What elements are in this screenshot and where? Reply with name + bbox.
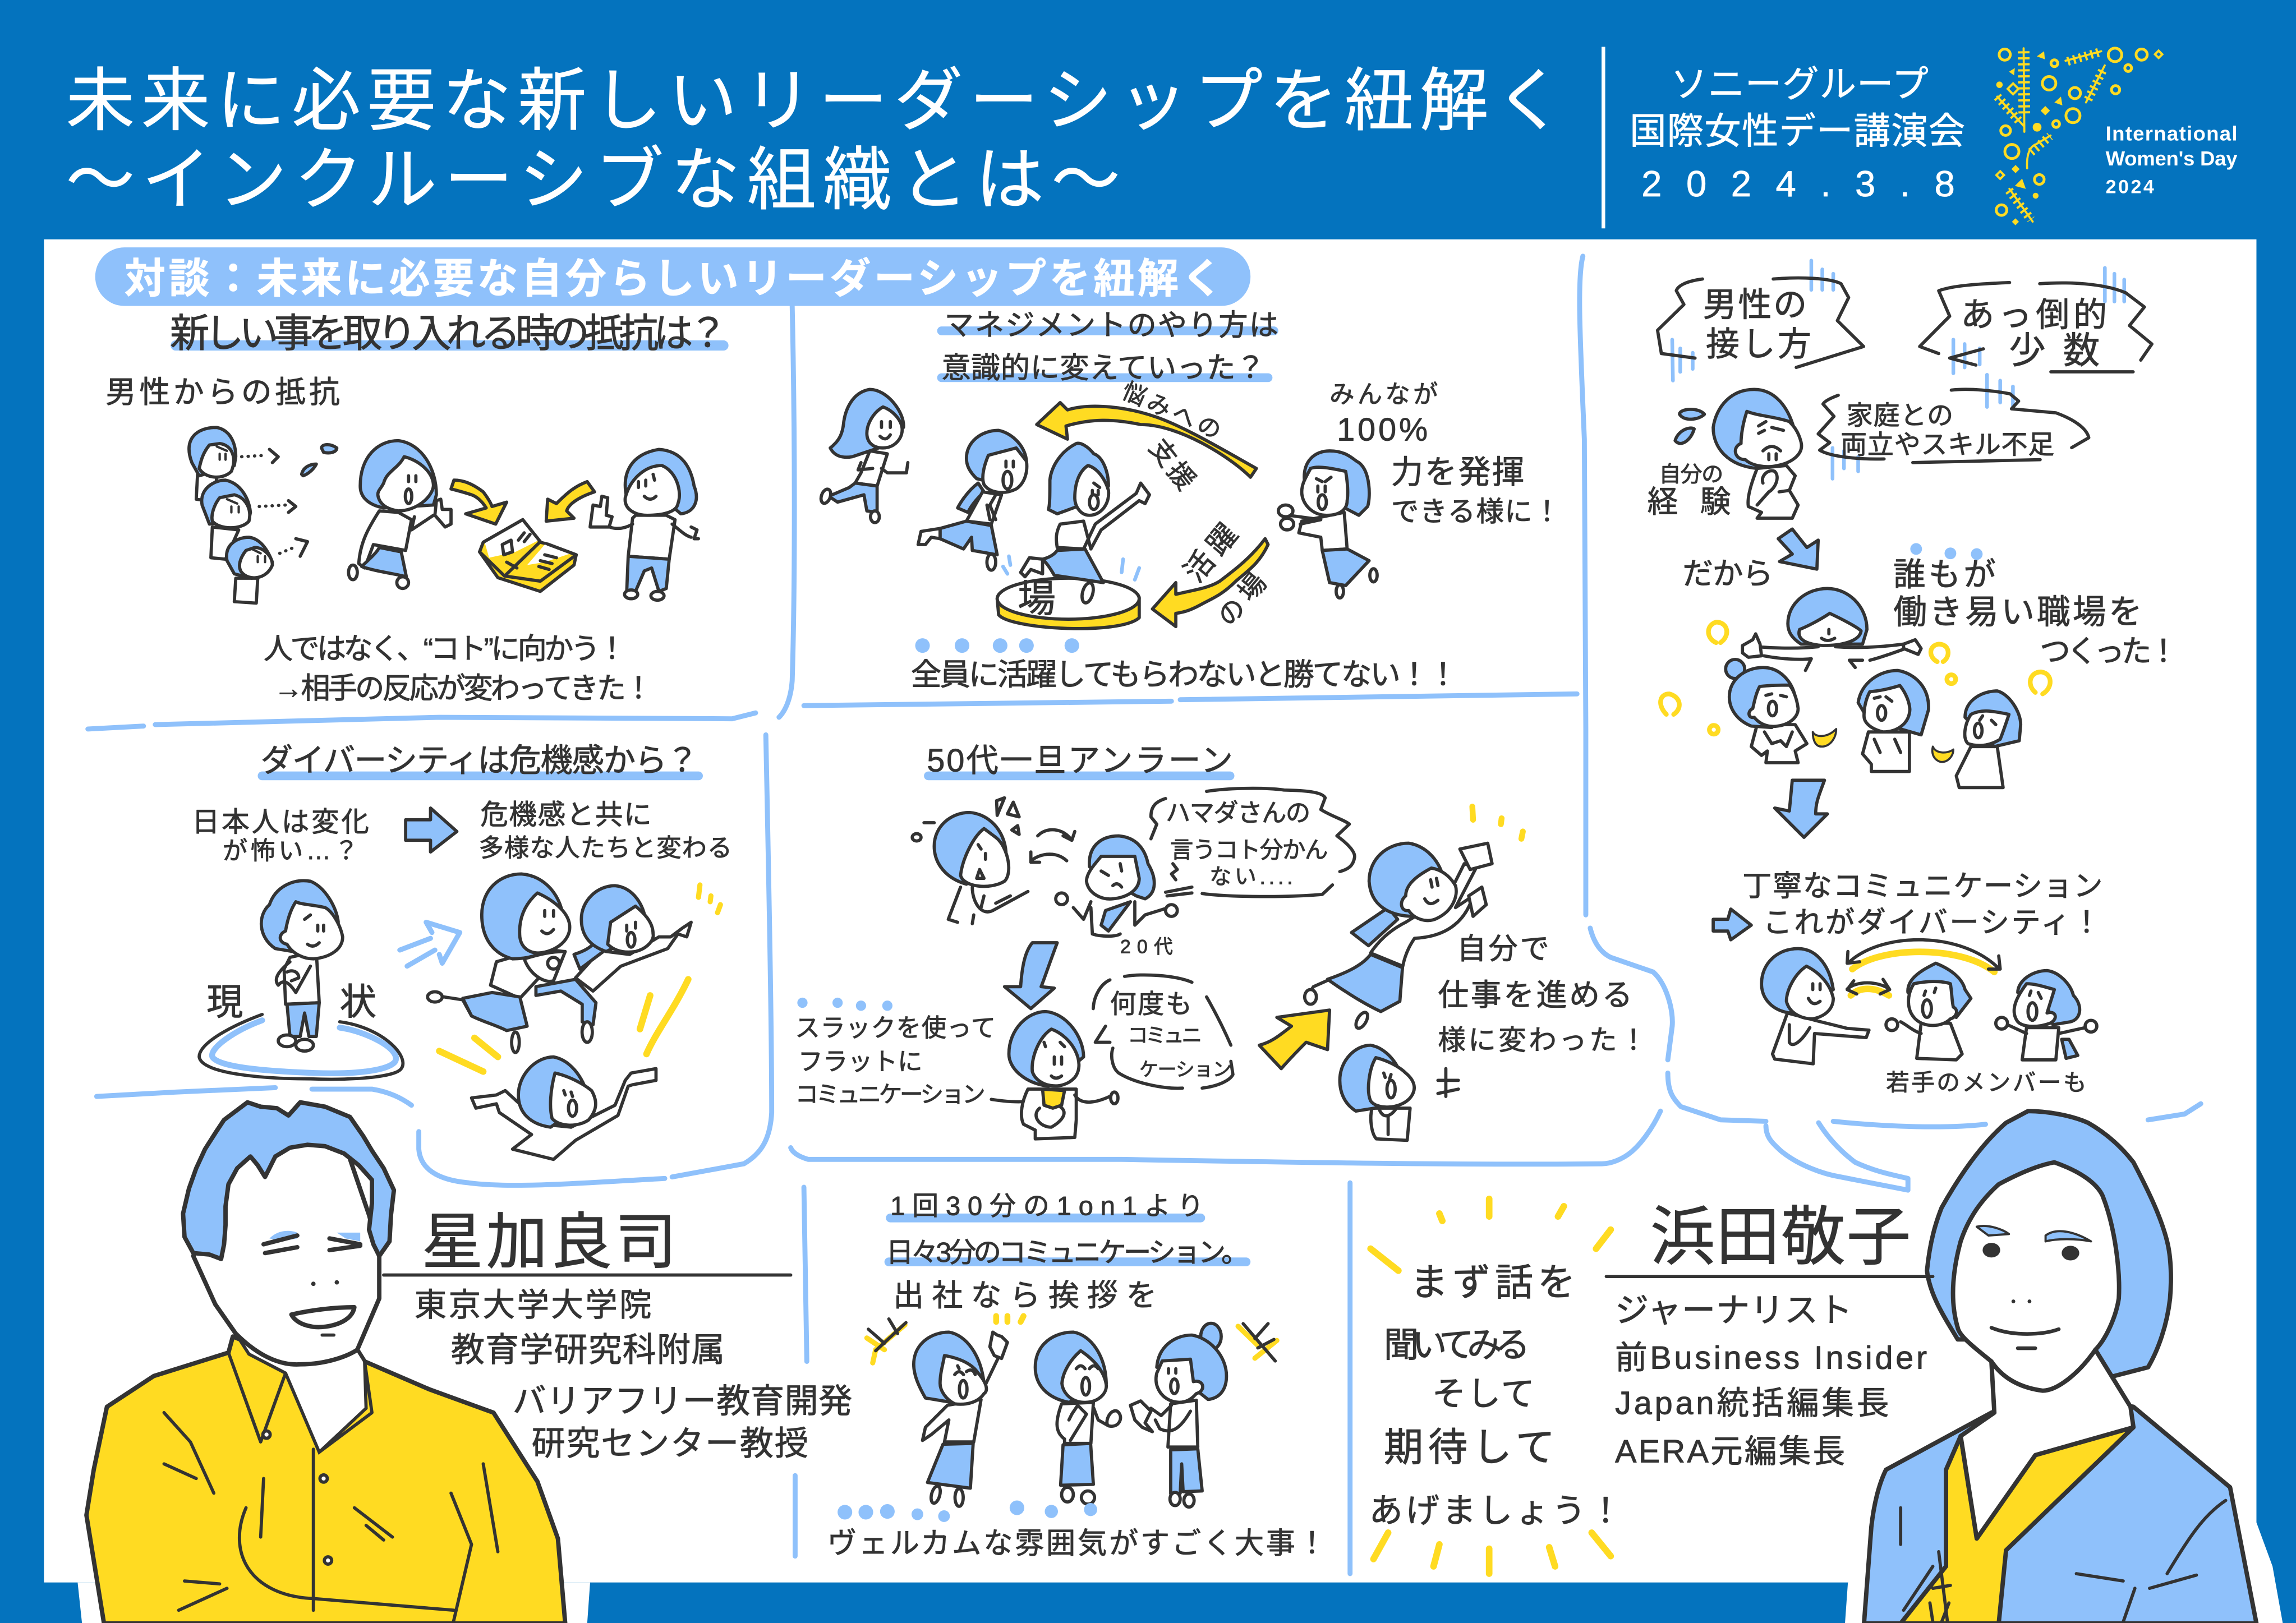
speech bubble (1151, 789, 1355, 897)
speech bubble: ない.... (1209, 865, 1293, 889)
icon: open book (480, 520, 576, 592)
name: 星加良司 (422, 1209, 677, 1277)
bubble: home and skills: 家庭との (1847, 400, 1953, 430)
logo text (2106, 122, 2238, 198)
status quo ring (199, 1015, 403, 1079)
leaping pair (427, 874, 720, 1072)
text: careful communication is diversity: これがダイバーシティ！ (1763, 907, 2101, 939)
text: careful communication is diversity (1742, 870, 2102, 939)
white margin under speakers (77, 1523, 2283, 1623)
small woman (1340, 1045, 1458, 1140)
message: 期待して (1384, 1425, 1555, 1469)
heading (941, 310, 1278, 384)
text: own experience (1648, 463, 1731, 519)
emphasis dots (915, 638, 1079, 653)
event name and date: ソニーグループ (1671, 63, 1929, 104)
three men icons (189, 427, 337, 603)
text: everyone at 100%: 力を発揮 (1391, 454, 1524, 490)
text: flat communication on Slack: コミュニケーション (795, 1081, 986, 1108)
label: place to excel (1178, 518, 1272, 631)
radiating lines (1370, 1199, 1611, 1574)
woman with phone (991, 1012, 1118, 1139)
affiliation: 東京大学大学院 (415, 1288, 652, 1324)
woman with thumb up (348, 441, 451, 588)
text: flat communication on Slack: スラックを使って (795, 1015, 996, 1042)
three colleagues (1726, 660, 2021, 787)
affiliation (415, 1288, 852, 1463)
arrow: support for worries (1037, 403, 1257, 477)
International Women's Day logo (1996, 48, 2238, 225)
caption: 全員に活躍してもらわないと勝てない！！ (911, 657, 1458, 692)
heading: マネジメントのやり方は (945, 310, 1278, 342)
speaker: Hamada (1607, 1111, 2256, 1623)
bubble: how to deal with men: 男性の (1703, 286, 1807, 324)
text: everyone at 100%: みんなが (1329, 381, 1438, 408)
panel dividers (88, 256, 2201, 1574)
emphasis dots (1910, 543, 1982, 560)
woman talking (1761, 948, 1869, 1064)
text: flat communication on Slack: フラットに (798, 1048, 923, 1076)
small double arrow (1847, 979, 1890, 995)
text: workplace for all: つくった！ (2040, 634, 2179, 668)
event name and date (1630, 63, 1965, 204)
titles (1615, 1292, 1927, 1470)
text: workplace for all (1893, 557, 2179, 668)
panel: resistance to new things (105, 311, 728, 705)
speaker: Hoshika (86, 1103, 852, 1623)
label: support: 支援 (1144, 433, 1201, 495)
main heading pill: 対談：未来に必要な自分らしいリーダーシップを紐解く (125, 256, 1223, 302)
titles: Japan統括編集長 (1615, 1386, 1889, 1422)
worried woman (1675, 389, 1801, 518)
affiliation: 教育学研究科附属 (451, 1331, 725, 1369)
young woman (1996, 971, 2097, 1060)
arrow (1713, 909, 1751, 940)
white content panel (44, 239, 2256, 1583)
emphasis dots (797, 998, 892, 1011)
text: change together: 多様な人たちと変わる (479, 834, 732, 862)
emphasis dots (838, 1501, 1097, 1522)
yellow rings (1660, 622, 2050, 734)
arrows to book (451, 480, 595, 524)
shirt (86, 1336, 565, 1623)
person in their 20s (1056, 836, 1177, 936)
title: 未来に必要な新しいリーダーシップを紐解く (66, 62, 1564, 139)
man with thumb up (590, 449, 698, 600)
neck (236, 1334, 366, 1452)
label: place to excel: 活躍 (1178, 518, 1244, 588)
woman with arms spread (1742, 588, 1921, 671)
text: own experience: 自分の (1659, 463, 1723, 487)
message: そして (1432, 1375, 1535, 1413)
arrow down right (1778, 529, 1818, 569)
flying woman (1305, 806, 1523, 1030)
text: change together: 危機感と共に (480, 799, 652, 831)
text: getting work done (1438, 933, 1648, 1056)
title: 〜インクルーシブな組織とは〜 (66, 141, 1120, 218)
panel: listen first callout (1369, 1199, 1622, 1574)
arrow down (1775, 780, 1828, 837)
text: own experience: 経験 (1648, 485, 1731, 519)
label: support (1118, 377, 1225, 495)
woman cheering on the stage (997, 443, 1149, 629)
header divider (1603, 47, 1604, 228)
text: afraid of change (192, 806, 369, 865)
person with fist (1278, 451, 1377, 598)
neck and face (1961, 1350, 2133, 1538)
text: flat communication on Slack (795, 1015, 996, 1108)
hair (1927, 1111, 2171, 1379)
caption (264, 633, 653, 705)
event name and date: 国際女性デー講演会 (1630, 110, 1965, 151)
bubble: overwhelming minority: 少数 (2009, 330, 2100, 371)
jacket details (1901, 1501, 2226, 1622)
name rule (384, 1274, 791, 1276)
repeated communication bubble (1093, 975, 1233, 1088)
heading: 出社なら挨拶を (893, 1278, 1157, 1312)
icon: mimosa sprigs (1996, 48, 2162, 225)
woman with bun (1130, 1324, 1226, 1507)
repeated communication bubble: ケーション (1139, 1059, 1231, 1081)
platform: 場: 場 (1018, 578, 1056, 620)
title (66, 62, 1564, 218)
shirt (1901, 1427, 2133, 1623)
outlined arrow (400, 922, 460, 966)
text: workplace for all: 誰もが (1893, 557, 1996, 593)
text: getting work done: 仕事を進める (1438, 978, 1632, 1012)
text: everyone at 100% (1329, 381, 1561, 527)
speech bubble: 言うコト分かん (1170, 837, 1328, 863)
titles: ジャーナリスト (1615, 1292, 1852, 1329)
bubble: overwhelming minority (1920, 268, 2152, 374)
panel: diversity comes from crisis (192, 743, 732, 1159)
text: getting work done: 自分で (1457, 933, 1549, 966)
shirt details (164, 1353, 498, 1623)
titles: AERA元編集長 (1615, 1434, 1845, 1470)
caption: ヴェルカムな雰囲気がすごく大事！ (827, 1527, 1327, 1560)
heading: 新しい事を取り入れる時の抵抗は？ (170, 311, 728, 356)
logo text: Women's Day (2106, 147, 2238, 170)
hair (183, 1103, 394, 1259)
face features (1977, 1226, 2091, 1242)
third person waving (472, 1057, 656, 1159)
label: status quo: 状 (340, 981, 376, 1022)
heading: 1回30分の1on1より (890, 1191, 1204, 1221)
message: まず話を (1410, 1262, 1576, 1304)
name: 浜田敬子 (1650, 1201, 1911, 1273)
young man (1886, 963, 1971, 1060)
panel: men and overwhelming minority (1648, 261, 2179, 1096)
text: therefore: だから (1682, 556, 1773, 591)
message (1369, 1262, 1622, 1530)
label: place to excel: の場 (1212, 568, 1272, 631)
text: careful communication is diversity: 丁寧なコミュニケーション (1742, 870, 2102, 902)
face (194, 1142, 379, 1364)
bubble: home and skills: 両立やスキル不足 (1841, 430, 2054, 459)
bubble: how to deal with men (1658, 261, 1864, 381)
heading: 意識的に変えていった？ (941, 352, 1265, 384)
arrow down (1005, 943, 1057, 1008)
text: everyone at 100%: 100% (1337, 412, 1428, 448)
arrow: place to excel (1152, 539, 1268, 626)
sparkle marks (867, 1319, 1277, 1363)
label: young members too: 若手のメンバーも (1886, 1069, 2087, 1096)
jacket (1864, 1391, 2256, 1623)
running woman with bag (918, 430, 1027, 570)
heading: 日々3分のコミュニケーション。 (886, 1237, 1249, 1268)
label: support: 悩みへの (1118, 377, 1225, 444)
platform: 場 (997, 578, 1139, 629)
name rule (1607, 1276, 1933, 1277)
text: afraid of change: が怖い…？ (223, 837, 359, 865)
text: getting work done: 様に変わった！ (1438, 1025, 1648, 1056)
message: あげましょう！ (1369, 1492, 1622, 1530)
logo text: 2024 (2106, 177, 2154, 198)
caption: 人ではなく、“コト”に向かう！ (264, 633, 627, 666)
man standing on status quo (199, 880, 403, 1079)
text: change together (479, 799, 732, 862)
label: status quo (206, 981, 376, 1022)
text: everyone at 100%: できる様に！ (1391, 496, 1561, 527)
logo text: International (2106, 122, 2238, 145)
repeated communication bubble: コミュニ (1128, 1024, 1202, 1047)
long-haired woman running (819, 389, 908, 523)
woman waving (914, 1316, 1024, 1506)
label: resistance from men: 男性からの抵抗 (105, 375, 340, 409)
caption: →相手の反応が変わってきた！ (274, 672, 653, 705)
panel: 1on1 communication (827, 1191, 1327, 1560)
face features (269, 1231, 360, 1242)
panel: changing management style (819, 310, 1561, 692)
text: workplace for all: 働き易い職場を (1893, 593, 2142, 631)
label: status quo: 現 (206, 981, 243, 1022)
speech bubble: ハマダさんの (1166, 799, 1310, 827)
affiliation: バリアフリー教育開発 (513, 1382, 852, 1420)
affiliation: 研究センター教授 (532, 1425, 808, 1463)
bubble: how to deal with men: 接し方 (1706, 325, 1811, 363)
heading: 50代一旦アンラーン (927, 743, 1233, 779)
repeated communication bubble: 何度も (1110, 989, 1192, 1018)
woman with hands together (1036, 1332, 1121, 1504)
yellow arrow (1259, 1010, 1329, 1068)
heading (886, 1191, 1249, 1312)
message: 聞いてみる (1384, 1326, 1530, 1365)
arrow (406, 808, 457, 852)
text: afraid of change: 日本人は変化 (192, 806, 369, 838)
bubble: overwhelming minority: あっ倒的 (1961, 296, 2107, 334)
bubble: home and skills (1818, 375, 2089, 479)
panel: unlearning in your 50s (795, 743, 1648, 1140)
titles: 前Business Insider (1615, 1340, 1927, 1376)
panicked woman (912, 798, 1075, 924)
label: 20s: 20代 (1120, 936, 1173, 957)
yellow arc arrow (1847, 940, 2000, 972)
event name and date: 2024.3.8 (1641, 163, 1955, 204)
heading: ダイバーシティは危機感から？ (261, 743, 698, 779)
